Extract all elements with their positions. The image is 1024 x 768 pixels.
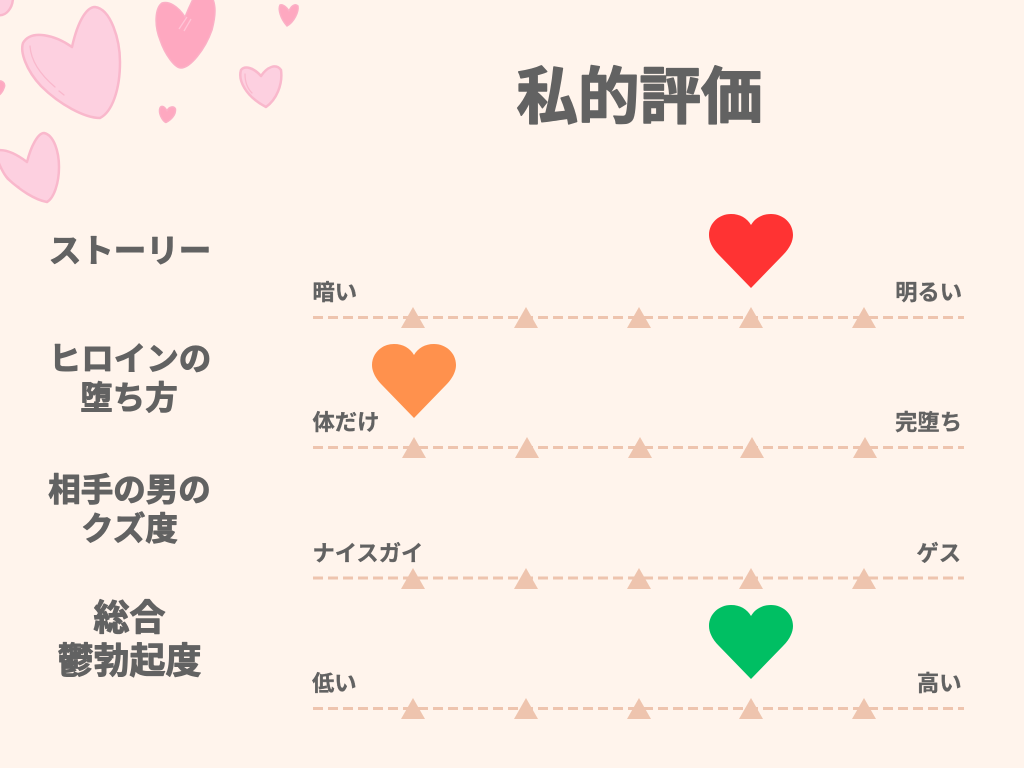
- scale: [313, 568, 964, 589]
- icon: lower-left pink heart: [0, 133, 59, 202]
- heading: heroine: ヒロインの: [49, 341, 211, 377]
- row: partner: [48, 472, 964, 589]
- icon: corner heart fragment: [0, 0, 13, 15]
- high label: 高い: [917, 671, 962, 696]
- heading: overall: 総合: [93, 597, 166, 638]
- icon: tiny pink heart: [159, 106, 176, 122]
- low label: ナイスガイ: [312, 541, 423, 566]
- title: 私的評価: [516, 63, 763, 132]
- icon: medium pink heart: [240, 66, 281, 107]
- scale: [313, 307, 964, 328]
- decorative pink hearts: [0, 0, 298, 202]
- icon: green heart marker: [709, 605, 793, 679]
- low label: 低い: [312, 671, 357, 696]
- scale: [313, 698, 964, 719]
- icon: orange heart marker: [372, 344, 456, 418]
- low label: 暗い: [312, 280, 357, 305]
- row: story: [49, 214, 964, 328]
- icon: darker pink heart: [156, 0, 215, 68]
- high label: ゲス: [916, 541, 961, 566]
- icon: left edge heart fragment: [0, 81, 5, 96]
- heading line two: クズ度: [81, 510, 178, 547]
- heading: partner: 相手の男の: [48, 472, 211, 508]
- low label: 体だけ: [312, 410, 379, 435]
- heading: story: ストーリー: [49, 233, 211, 269]
- icon: small top-right heart: [279, 5, 298, 26]
- heading line two: 鬱勃起度: [57, 640, 202, 681]
- heading line two: 堕ち方: [80, 380, 178, 416]
- high label: 明るい: [895, 280, 962, 305]
- icon: large pink heart: [22, 7, 120, 118]
- row: overall: [57, 597, 964, 719]
- icon: red heart marker: [709, 214, 793, 288]
- row: heroine: [49, 341, 964, 458]
- high label: 完堕ち: [895, 410, 962, 435]
- scale: [313, 437, 964, 458]
